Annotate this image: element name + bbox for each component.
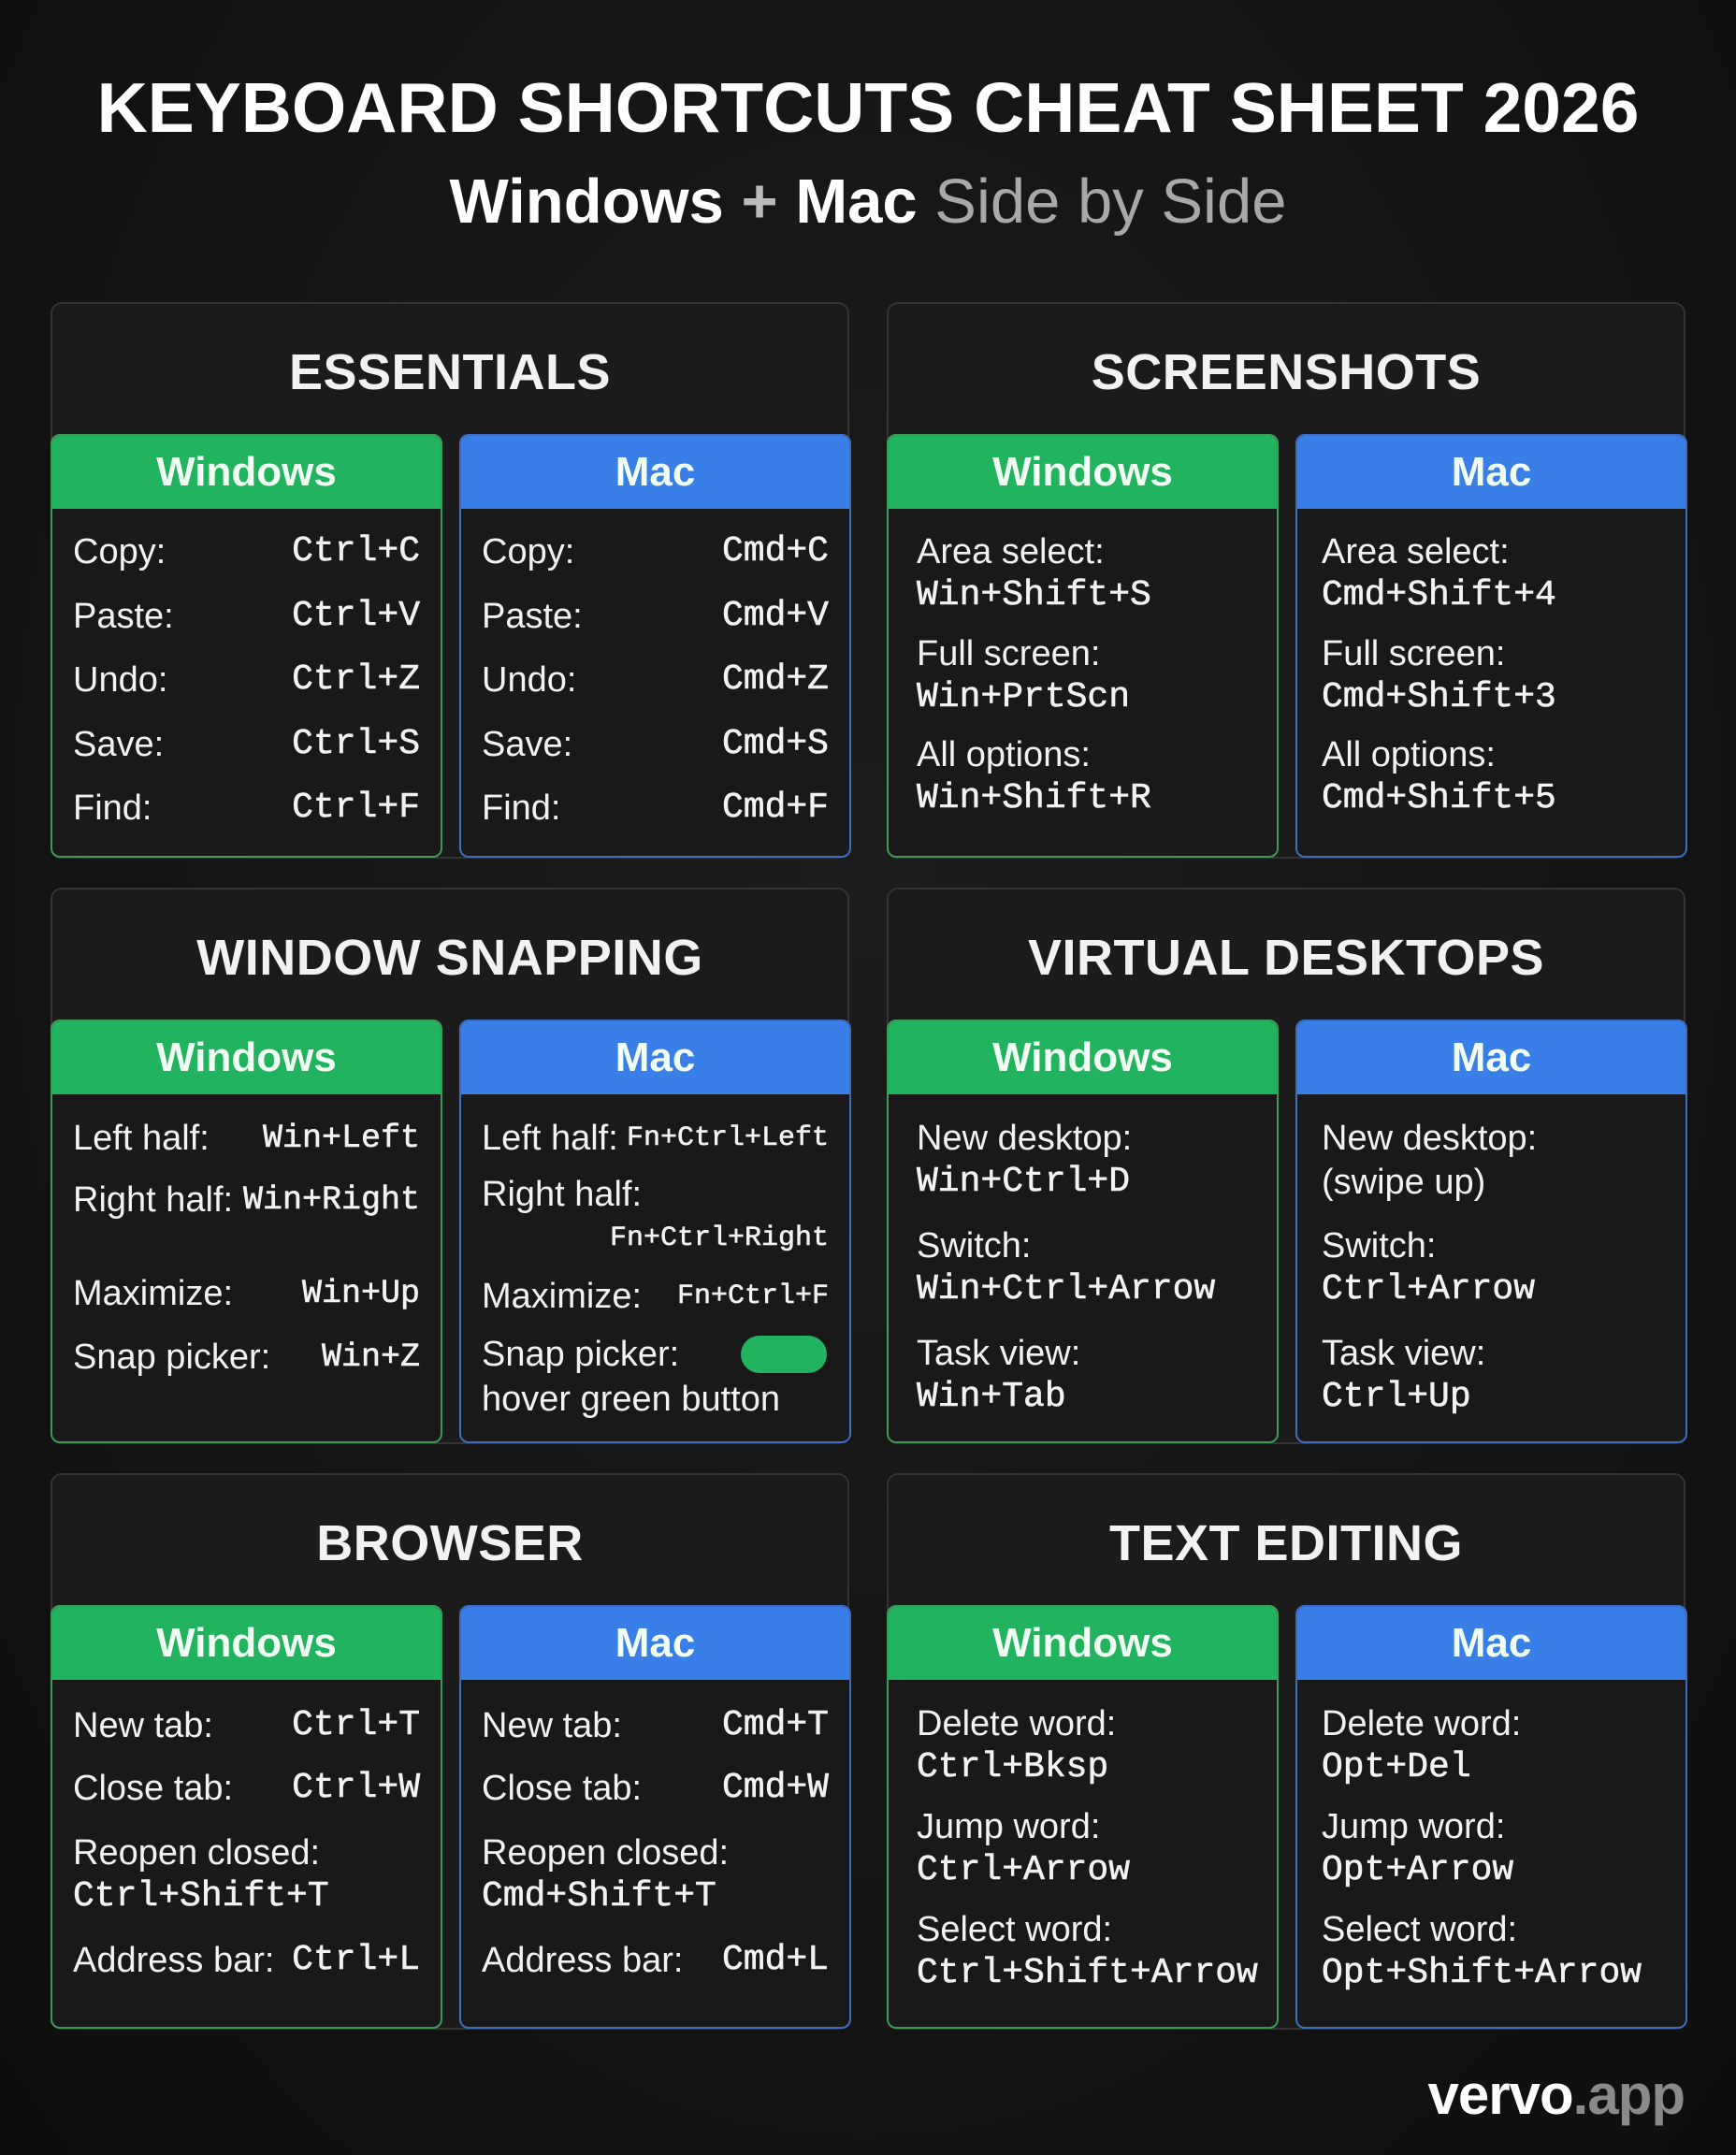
column: snapping windows: Left half: bbox=[73, 1119, 210, 1158]
panel: browser bbox=[51, 1473, 849, 2030]
column: screenshots mac bbox=[1295, 434, 1687, 858]
column: essentials mac: Save: bbox=[482, 725, 572, 764]
column: essentials windows: Ctrl+V bbox=[292, 596, 420, 636]
column: desktops mac: Switch: bbox=[1322, 1226, 1436, 1266]
column: browser mac: Close tab: bbox=[482, 1769, 642, 1808]
column: screenshots mac: Cmd+Shift+3 bbox=[1322, 677, 1556, 717]
column: browser windows: Address bar: bbox=[73, 1941, 274, 1980]
column: browser mac: Address bar: bbox=[482, 1941, 683, 1980]
column: text editing mac: Opt+Del bbox=[1322, 1747, 1471, 1787]
column: desktops windows: Switch: bbox=[917, 1226, 1031, 1266]
column: desktops windows: Win+Ctrl+D bbox=[917, 1162, 1130, 1202]
column: desktops mac bbox=[1295, 1020, 1687, 1443]
column: screenshots mac: Cmd+Shift+5 bbox=[1322, 778, 1556, 818]
panel: window snapping bbox=[51, 888, 849, 1444]
panel: essentials bbox=[51, 302, 849, 859]
column: browser windows: Ctrl+T bbox=[292, 1705, 420, 1745]
column: browser mac: Cmd+Shift+T bbox=[482, 1876, 716, 1916]
column: text editing mac bbox=[1295, 1605, 1687, 2029]
column: browser windows: Reopen closed: bbox=[73, 1833, 320, 1873]
column: essentials windows: Undo: bbox=[73, 660, 167, 700]
column: browser mac: Cmd+T bbox=[722, 1705, 829, 1745]
column: browser windows: Ctrl+W bbox=[292, 1768, 420, 1808]
column: snapping mac: hover green button bbox=[482, 1380, 780, 1419]
column: browser mac: Cmd+W bbox=[722, 1768, 829, 1808]
column: desktops mac: Ctrl+Up bbox=[1322, 1377, 1471, 1417]
column: text editing mac: Delete word: bbox=[1322, 1704, 1521, 1743]
column: essentials mac: Cmd+F bbox=[722, 788, 829, 828]
column: essentials mac: Cmd+Z bbox=[722, 659, 829, 700]
column: text editing mac: Opt+Arrow bbox=[1322, 1850, 1513, 1890]
column: essentials mac: Copy: bbox=[482, 532, 574, 571]
column: browser mac: New tab: bbox=[482, 1706, 622, 1745]
column: text editing windows: Delete word: bbox=[917, 1704, 1116, 1743]
column: text editing windows: Select word: bbox=[917, 1910, 1112, 1949]
heading: virtual desktops: VIRTUAL DESKTOPS bbox=[1028, 930, 1544, 986]
column: snapping mac: Fn+Ctrl+Right bbox=[610, 1222, 829, 1254]
column: snapping windows: Right half: bbox=[73, 1180, 233, 1220]
panel: virtual desktops bbox=[887, 888, 1685, 1444]
column: snapping mac: Fn+Ctrl+F bbox=[677, 1280, 829, 1312]
column: browser windows: Close tab: bbox=[73, 1769, 233, 1808]
column: essentials mac: Mac bbox=[615, 449, 695, 495]
column: text editing mac: Select word: bbox=[1322, 1910, 1517, 1949]
column: desktops mac: Mac bbox=[1452, 1034, 1531, 1080]
column: snapping mac bbox=[459, 1020, 851, 1443]
column: desktops mac: Task view: bbox=[1322, 1334, 1485, 1373]
column: snapping windows: Win+Right bbox=[243, 1181, 420, 1219]
column: text editing mac: Opt+Shift+Arrow bbox=[1322, 1953, 1642, 1993]
heading: window snapping: WINDOW SNAPPING bbox=[196, 930, 703, 986]
column: screenshots mac: Area select: bbox=[1322, 532, 1510, 571]
column: text editing windows: Ctrl+Bksp bbox=[917, 1747, 1108, 1787]
subtitle: Windows + Mac Side by Side bbox=[449, 166, 1286, 237]
heading: screenshots: SCREENSHOTS bbox=[1092, 344, 1481, 400]
column: essentials windows: Paste: bbox=[73, 597, 174, 636]
column: essentials mac: Find: bbox=[482, 788, 560, 828]
column: essentials windows: Ctrl+F bbox=[292, 788, 420, 828]
column: desktops mac: New desktop: bbox=[1322, 1119, 1537, 1158]
column: browser windows: Windows bbox=[156, 1620, 337, 1666]
column: screenshots windows: Full screen: bbox=[917, 634, 1100, 673]
column: desktops windows: Win+Ctrl+Arrow bbox=[917, 1269, 1215, 1309]
column: essentials mac bbox=[459, 434, 851, 858]
column: text editing windows: Ctrl+Shift+Arrow bbox=[917, 1953, 1258, 1993]
column: browser windows bbox=[51, 1605, 442, 2029]
column: snapping windows: Windows bbox=[156, 1034, 337, 1080]
column: screenshots windows: Win+PrtScn bbox=[917, 677, 1130, 717]
column: screenshots windows: Area select: bbox=[917, 532, 1105, 571]
column: screenshots mac: Cmd+Shift+4 bbox=[1322, 575, 1556, 615]
column: essentials windows: Copy: bbox=[73, 532, 166, 571]
column: desktops mac: (swipe up) bbox=[1322, 1163, 1485, 1202]
column: desktops windows: Task view: bbox=[917, 1334, 1080, 1373]
panel: text editing bbox=[887, 1473, 1685, 2030]
column: text editing windows: Ctrl+Arrow bbox=[917, 1850, 1130, 1890]
column: snapping mac: Fn+Ctrl+Left bbox=[627, 1122, 829, 1154]
column: snapping windows: Snap picker: bbox=[73, 1338, 270, 1377]
column: snapping mac: Left half: bbox=[482, 1119, 618, 1158]
column: browser windows: New tab: bbox=[73, 1706, 213, 1745]
column: browser windows: Ctrl+Shift+T bbox=[73, 1876, 329, 1916]
icon: green button bbox=[741, 1336, 827, 1373]
column: snapping windows bbox=[51, 1020, 442, 1443]
heading: essentials: ESSENTIALS bbox=[289, 344, 611, 400]
column: essentials windows: Find: bbox=[73, 788, 152, 828]
title: KEYBOARD SHORTCUTS CHEAT SHEET 2026 bbox=[97, 68, 1639, 147]
column: screenshots windows bbox=[887, 434, 1279, 858]
column: browser mac bbox=[459, 1605, 851, 2029]
column: browser mac: Reopen closed: bbox=[482, 1833, 729, 1873]
column: text editing windows: Windows bbox=[992, 1620, 1173, 1666]
column: essentials mac: Cmd+C bbox=[722, 531, 829, 571]
column: desktops mac: Ctrl+Arrow bbox=[1322, 1269, 1535, 1309]
column: snapping windows: Win+Up bbox=[302, 1275, 420, 1312]
column: desktops windows: Win+Tab bbox=[917, 1377, 1066, 1417]
column: snapping mac: Right half: bbox=[482, 1175, 642, 1214]
column: snapping windows: Win+Left bbox=[263, 1120, 420, 1157]
column: screenshots windows: Win+Shift+R bbox=[917, 778, 1151, 818]
column: essentials windows: Ctrl+C bbox=[292, 531, 420, 571]
column: browser mac: Mac bbox=[615, 1620, 695, 1666]
column: text editing windows: Jump word: bbox=[917, 1807, 1100, 1846]
column: desktops windows bbox=[887, 1020, 1279, 1443]
heading: browser: BROWSER bbox=[316, 1515, 584, 1571]
column: essentials mac: Paste: bbox=[482, 597, 583, 636]
column: text editing mac: Mac bbox=[1452, 1620, 1531, 1666]
column: essentials mac: Undo: bbox=[482, 660, 576, 700]
column: essentials windows: Save: bbox=[73, 725, 164, 764]
column: text editing windows bbox=[887, 1605, 1279, 2029]
column: essentials windows: Ctrl+S bbox=[292, 724, 420, 764]
column: essentials windows bbox=[51, 434, 442, 858]
column: desktops windows: Windows bbox=[992, 1034, 1173, 1080]
column: desktops windows: New desktop: bbox=[917, 1119, 1132, 1158]
panel: screenshots bbox=[887, 302, 1685, 859]
column: snapping mac: Maximize: bbox=[482, 1277, 642, 1316]
column: essentials windows: Windows bbox=[156, 449, 337, 495]
column: screenshots windows: Windows bbox=[992, 449, 1173, 495]
column: snapping mac: Mac bbox=[615, 1034, 695, 1080]
column: snapping mac: Snap picker: bbox=[482, 1335, 679, 1374]
column: essentials mac: Cmd+S bbox=[722, 724, 829, 764]
column: snapping windows: Win+Z bbox=[322, 1338, 420, 1376]
column: screenshots mac: Mac bbox=[1452, 449, 1531, 495]
column: screenshots windows: All options: bbox=[917, 735, 1091, 774]
column: browser mac: Cmd+L bbox=[722, 1940, 829, 1980]
column: screenshots mac: Full screen: bbox=[1322, 634, 1505, 673]
column: browser windows: Ctrl+L bbox=[292, 1940, 420, 1980]
heading: text editing: TEXT EDITING bbox=[1109, 1515, 1463, 1571]
footer: brand: vervo.app bbox=[1428, 2063, 1685, 2126]
column: text editing mac: Jump word: bbox=[1322, 1807, 1505, 1846]
column: essentials mac: Cmd+V bbox=[722, 596, 829, 636]
column: screenshots mac: All options: bbox=[1322, 735, 1496, 774]
column: screenshots windows: Win+Shift+S bbox=[917, 575, 1151, 615]
column: snapping windows: Maximize: bbox=[73, 1274, 233, 1313]
column: essentials windows: Ctrl+Z bbox=[292, 659, 420, 700]
